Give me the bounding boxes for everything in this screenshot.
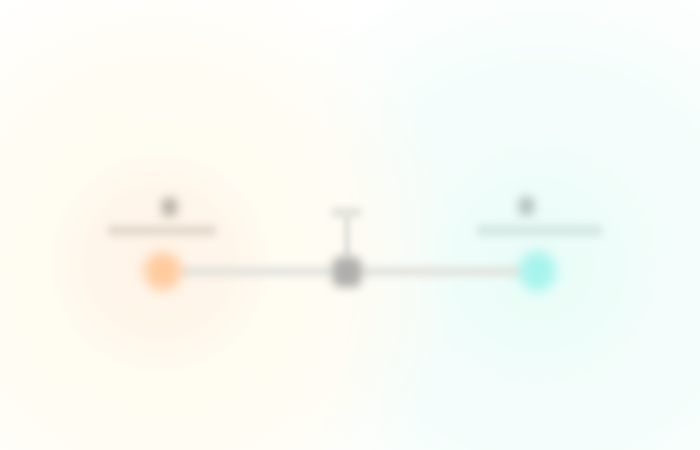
right node: teal dot	[519, 251, 556, 291]
timeline connector line	[178, 267, 523, 276]
right column: teal milestone	[476, 192, 604, 297]
left node: orange dot	[144, 252, 181, 290]
left column: orange milestone	[106, 193, 218, 296]
centre column: grey milestone	[328, 206, 366, 293]
centre stem	[344, 215, 350, 257]
right icon	[519, 197, 534, 215]
centre node: grey square	[333, 257, 361, 287]
left icon	[162, 198, 177, 216]
left label, illegible in reference	[108, 225, 216, 236]
centre label, illegible in reference	[332, 208, 361, 217]
right label, illegible in reference	[477, 225, 602, 236]
